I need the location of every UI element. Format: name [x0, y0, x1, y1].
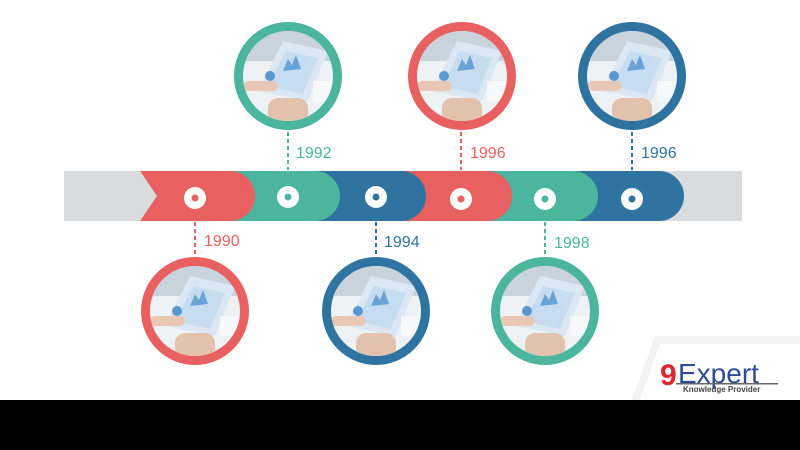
background bar [64, 171, 742, 221]
timeline segments [140, 171, 684, 221]
logo area: Expert [678, 358, 759, 389]
connectors and year labels: 1994 [384, 234, 420, 251]
logo area: Knowledge Provider [683, 385, 760, 394]
connectors and year labels: 1996 [470, 145, 506, 162]
timeline dots [184, 186, 643, 210]
connectors and year labels: 1990 [204, 233, 240, 250]
connectors and year labels: 1998 [554, 235, 590, 252]
photo circles [141, 22, 686, 365]
logo area: 9 [660, 359, 677, 392]
connectors and year labels: 1996 [641, 145, 677, 162]
connectors and year labels: 1992 [296, 145, 332, 162]
bottom black band [0, 400, 800, 450]
connectors and year labels [195, 132, 677, 258]
logo area [632, 336, 800, 400]
